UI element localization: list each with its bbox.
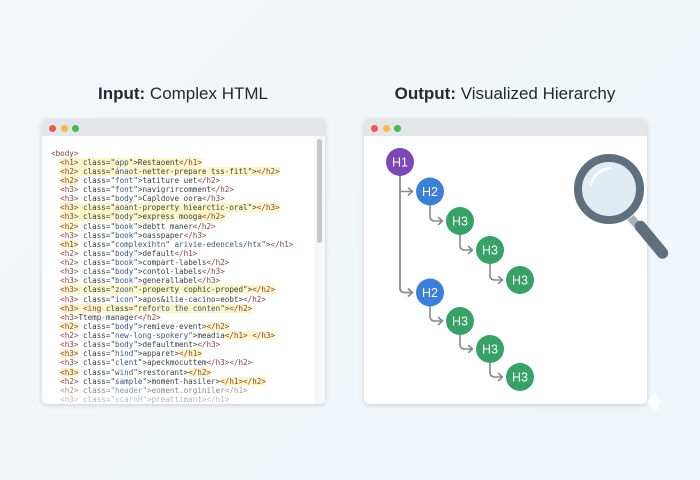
html code listing: <h2> class="sample">moment-hasiler></h1></h2> xyxy=(60,377,266,386)
html code listing: <h3> class="wind">restorant></h2> xyxy=(60,368,211,376)
title: input: Input: Complex HTML xyxy=(98,84,268,103)
panel: output hierarchy window xyxy=(364,119,647,404)
html code listing: <h2> class="book">compart-labels</h2> xyxy=(60,258,229,267)
html code listing: <h3> class="clent">apeckmocuttem</h3></h2> xyxy=(60,358,252,367)
node H3: H3 xyxy=(512,370,528,384)
window title bar xyxy=(364,119,647,136)
html code listing: <h3> class="font">navigrircomment</h2> xyxy=(60,185,234,194)
html code listing: <h3> class="aoant-property hiearctic-oral"></h3> xyxy=(60,203,280,212)
node H3 xyxy=(476,335,504,363)
node H3 xyxy=(446,307,474,335)
node H3 xyxy=(506,266,534,294)
html code listing: <h1> class="complexihtn" arivie-edencels/htx"></h1> xyxy=(60,240,293,249)
node H1: H1 xyxy=(392,156,408,170)
html code listing: <h3> class="icon">apos&ilie-cacino=eobt></h2> xyxy=(60,294,266,304)
html code listing: <h3> class="book">oasspaper</h3> xyxy=(60,231,206,240)
node H3 xyxy=(506,363,534,391)
node H3: H3 xyxy=(452,314,468,328)
scrollbar thumb xyxy=(317,139,322,243)
node H2: H2 xyxy=(422,286,438,300)
panel: input code window xyxy=(42,119,325,404)
node H3: H3 xyxy=(482,342,498,356)
html code listing: <h3> class="book">generallabel</h3> xyxy=(60,276,220,285)
html code listing: <h2> class="ánaot-netter-prepare tss-fitl"></h2> xyxy=(60,167,280,176)
html code listing: <h3> class="body">contol-labels</h3> xyxy=(60,267,225,276)
html code listing: <h3> class="body">defaultment></h3> xyxy=(60,340,220,349)
node H3 xyxy=(446,207,474,235)
html code listing: <h2> class="body">default</h1> xyxy=(60,249,197,258)
node H1 xyxy=(386,148,414,176)
icon: magnifying glass xyxy=(573,153,662,253)
node H2 xyxy=(416,278,444,306)
html code listing: <h3> class="zoon"-property cophic-proped"></h2> xyxy=(60,285,275,294)
html code listing: <h3> class="body">express mooga</h2> xyxy=(60,212,225,221)
html code listing: <h3> class="hind">apparet></h1> xyxy=(60,349,202,358)
node H3: H3 xyxy=(482,244,498,258)
node H3: H3 xyxy=(452,214,468,228)
nodes xyxy=(386,148,534,391)
html code listing: <h1> class="app">Restaoent</h1> xyxy=(60,158,202,167)
html code listing: <h3> <ing class="reforto the conten"></h2> xyxy=(60,304,252,313)
node H3 xyxy=(476,236,504,264)
html code listing: <h3>Ttemp-manager</h2> xyxy=(60,313,161,322)
html code listing: <h3> class="body">Capldove oora</h3> xyxy=(60,194,225,203)
title: output: Output: Visualized Hierarchy xyxy=(395,84,615,103)
node H2: H2 xyxy=(422,185,438,199)
window title bar xyxy=(42,119,325,136)
html code listing xyxy=(51,148,293,404)
html code listing: <h2> class="font">tatiture uet</h2> xyxy=(60,176,220,185)
html code listing: <h2> class="new-long-spokery">meadia</h1> </h3> xyxy=(60,331,275,340)
connectors xyxy=(400,176,502,380)
html code listing: <h2> class="body">remieve-event></h2> xyxy=(60,322,229,331)
html code listing: <h2> class="book">debtt maner</h2> xyxy=(60,222,216,230)
node H3: H3 xyxy=(512,274,528,288)
scrollbar track xyxy=(314,136,325,404)
watermark sparkle xyxy=(647,392,661,412)
node H2 xyxy=(416,178,444,206)
html code listing: <body> xyxy=(51,148,78,158)
html code listing: <h2> class="header">eoment.orginiler</h1> xyxy=(60,386,248,395)
